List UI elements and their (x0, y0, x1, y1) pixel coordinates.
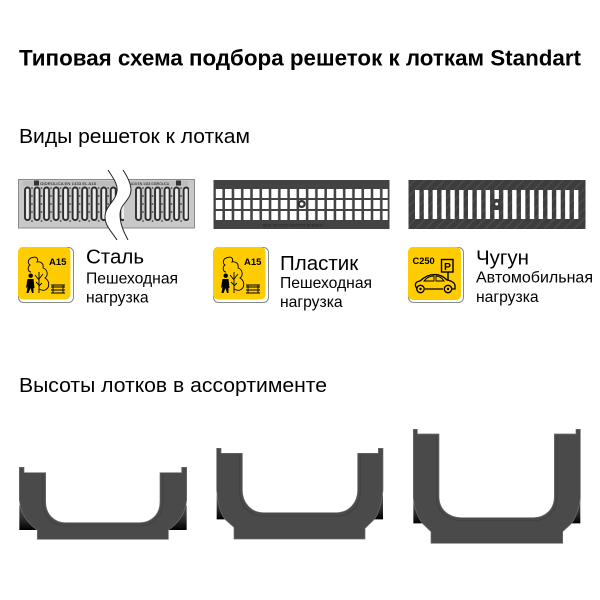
text: plastic label (280, 252, 372, 311)
panel: plastic grate: GIDROLICA EN 1433 EL A15 (263, 223, 323, 227)
text: cast iron label: Чугун (476, 246, 529, 270)
panel: steel grate: A15 EN 1433 GIDROLICA (131, 182, 169, 186)
icon: pedestrian load A15 (plastic): A15 (244, 257, 262, 268)
panel: steel grate (18, 170, 194, 240)
text: steel label: Пешеходная (86, 270, 178, 288)
text: plastic label: нагрузка (280, 294, 343, 311)
heading: grate types: Виды решеток к лоткам (19, 125, 250, 148)
wave break (105, 170, 131, 240)
tray profile: medium (217, 448, 383, 539)
tray profile: small (19, 467, 187, 539)
title: Типовая схема подбора решеток к лоткам Standart (19, 46, 582, 70)
text: plastic label: Пластик (280, 252, 359, 275)
text: steel label (86, 246, 178, 306)
text: cast iron label: Автомобильная (476, 270, 593, 286)
icon: pedestrian load A15 (steel) (18, 247, 74, 302)
icon: vehicle load C250 (cast iron) (408, 247, 464, 302)
text: cast iron label (476, 246, 593, 306)
panel: cast iron grate (408, 180, 586, 229)
text: steel label: нагрузка (86, 290, 149, 306)
text: steel label: Сталь (86, 246, 144, 268)
text: plastic label: Пешеходная (280, 275, 372, 292)
icon: pedestrian load A15 (steel): A15 (49, 257, 67, 268)
panel: steel grate: GIDROLICA EN 1433 EL A15 (40, 182, 96, 186)
text: cast iron label: нагрузка (476, 289, 539, 306)
icon: vehicle load C250 (cast iron): P (444, 261, 451, 273)
panel: plastic grate (214, 180, 390, 229)
heading: tray heights: Высоты лотков в ассортименте (19, 374, 327, 397)
icon: pedestrian load A15 (plastic) (213, 247, 268, 302)
tray profile: large (413, 429, 580, 543)
icon: vehicle load C250 (cast iron): C250 (412, 256, 435, 266)
